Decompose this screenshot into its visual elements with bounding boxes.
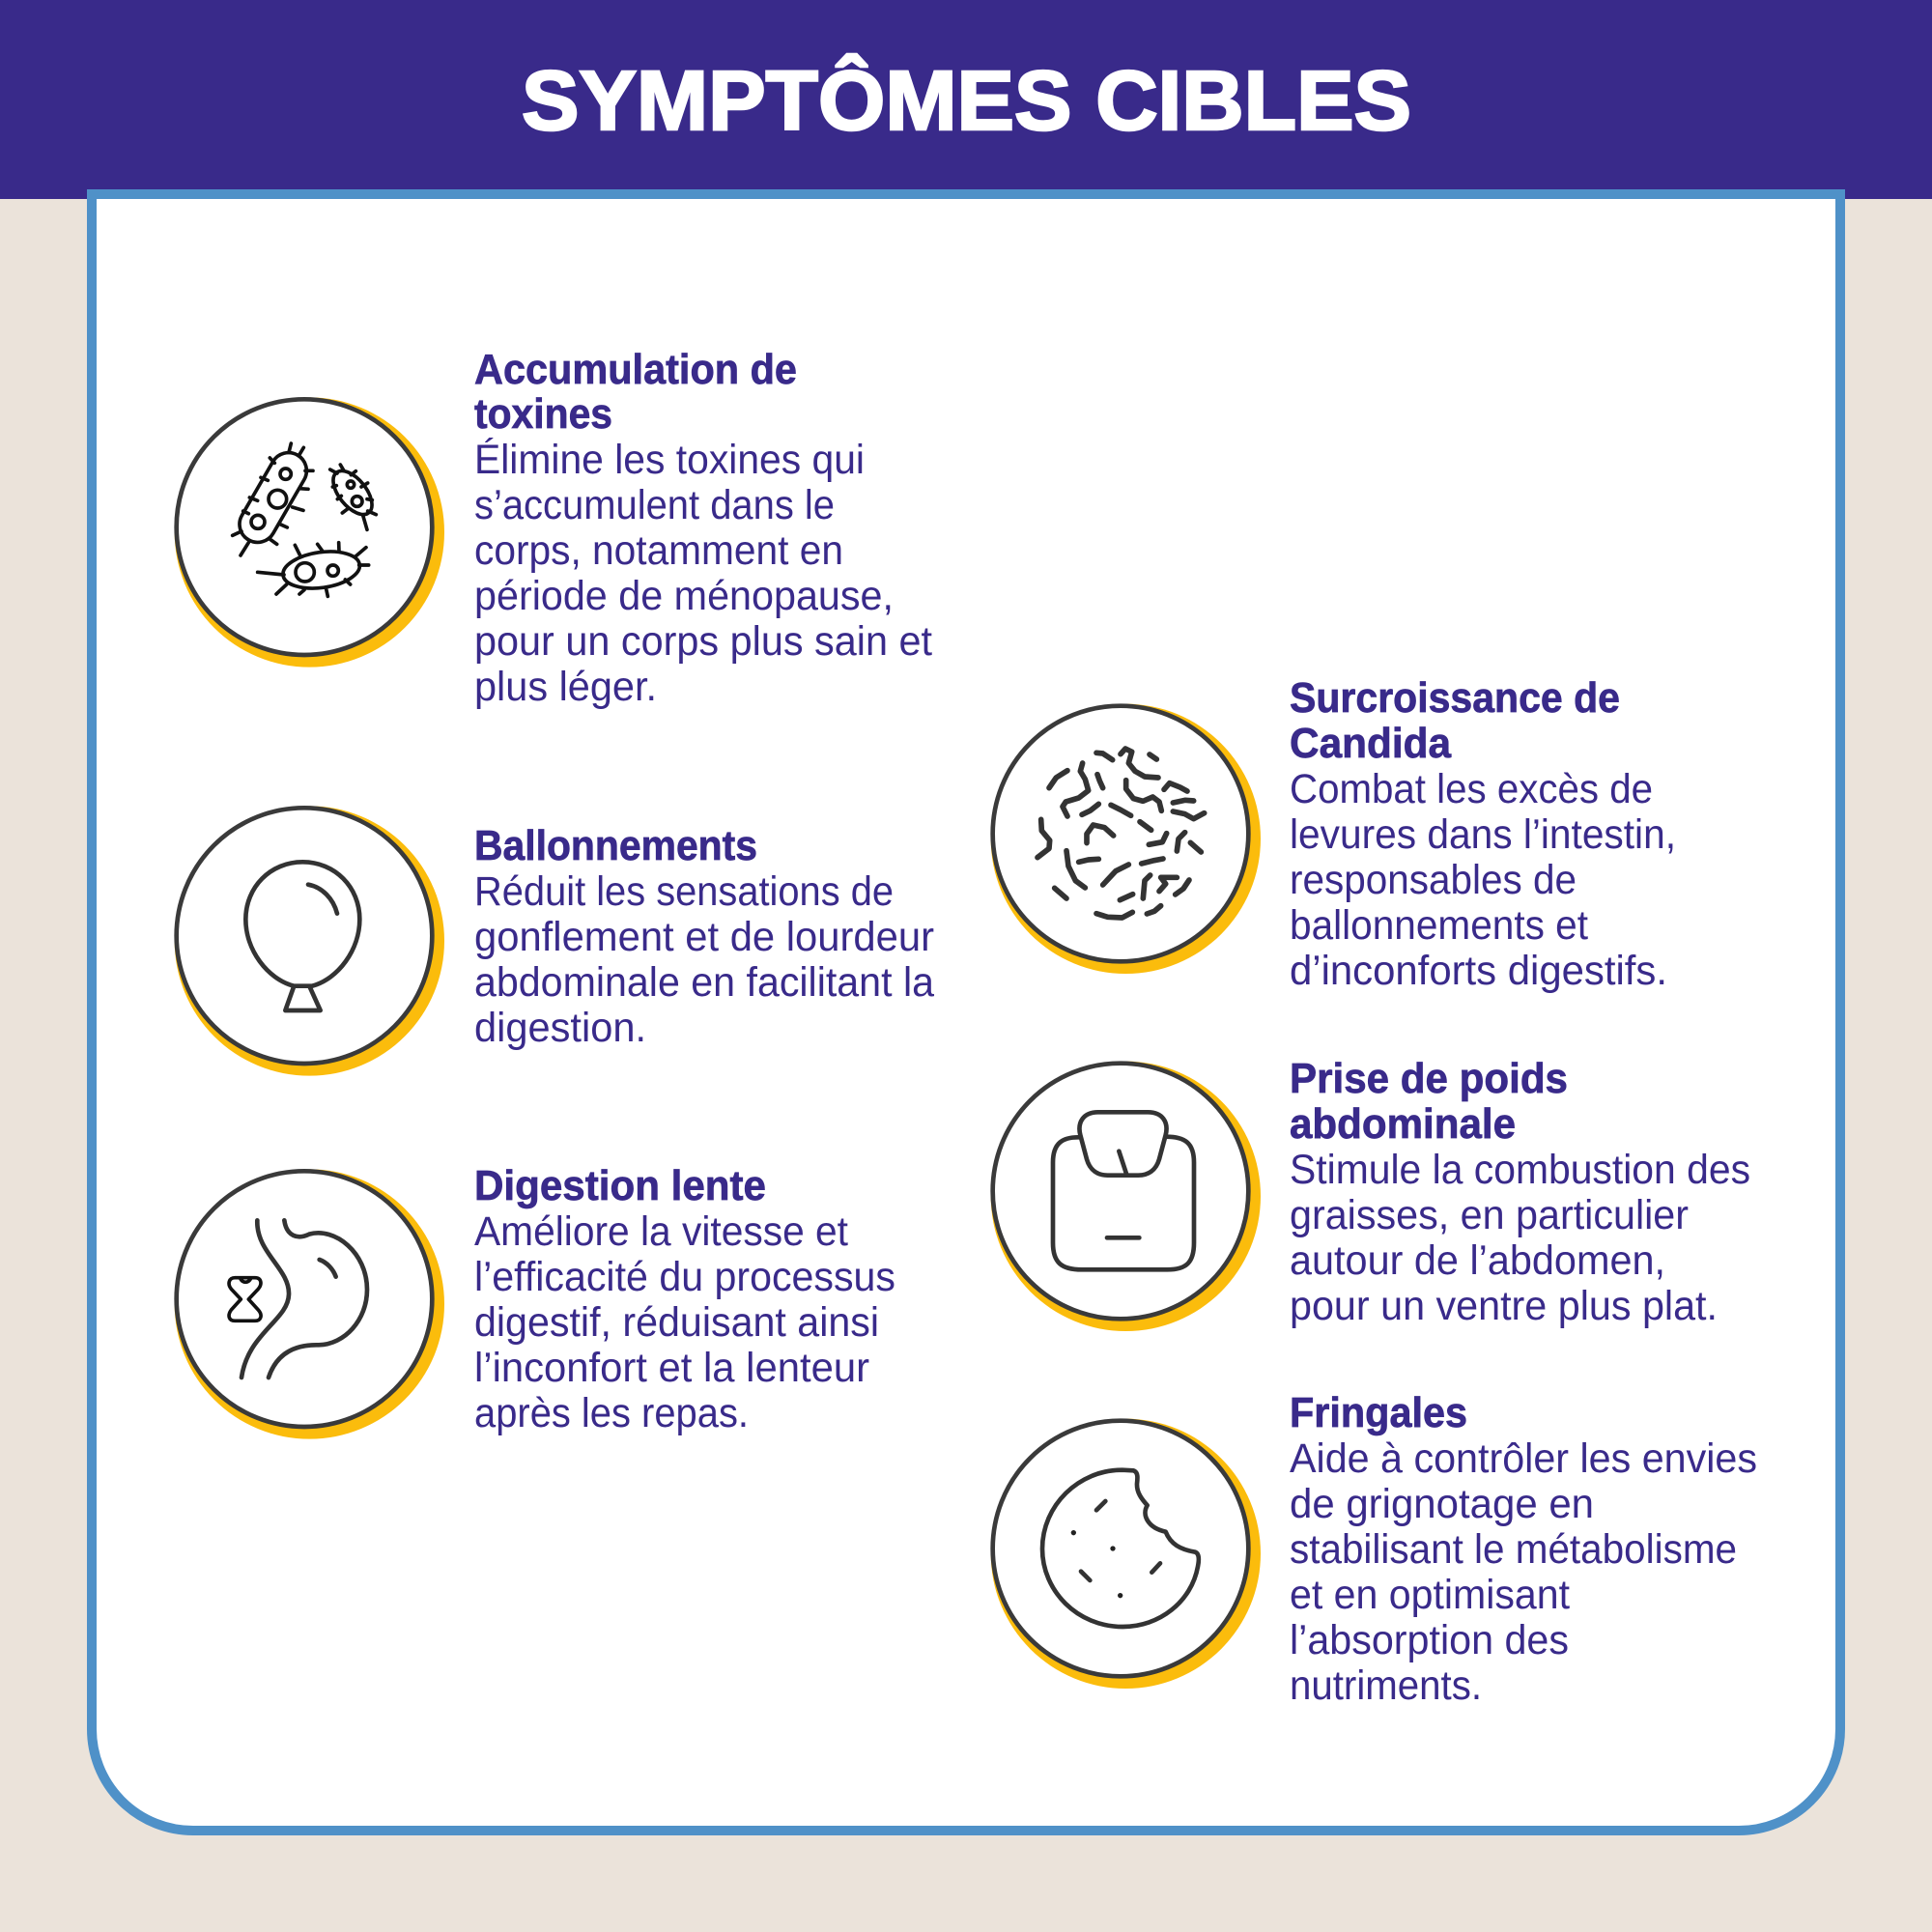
text block: période de ménopause, bbox=[474, 574, 894, 619]
panel: white card with blue border bbox=[92, 194, 1840, 1831]
text block: pour un ventre plus plat. bbox=[1290, 1284, 1718, 1329]
text block: nutriments. bbox=[1290, 1663, 1482, 1709]
text block bbox=[474, 1209, 895, 1436]
heading: Digestion lente bbox=[474, 1162, 766, 1209]
heading: Ballonnements bbox=[474, 822, 757, 869]
text block: plus léger. bbox=[474, 665, 657, 710]
heading: Prise de poids bbox=[1290, 1055, 1568, 1102]
text block: graisses, en particulier bbox=[1290, 1193, 1689, 1238]
text block: d’inconforts digestifs. bbox=[1290, 949, 1667, 994]
heading: Accumulation de bbox=[474, 346, 797, 393]
text block: l’inconfort et la lenteur bbox=[474, 1346, 869, 1391]
item: Digestion lente bbox=[175, 1162, 895, 1439]
icon: stomach and hourglass bbox=[175, 1169, 444, 1439]
icon: balloon bbox=[175, 806, 444, 1076]
heading bbox=[1290, 1055, 1568, 1148]
text block bbox=[474, 438, 932, 710]
text block bbox=[1290, 1436, 1757, 1709]
text block: digestif, réduisant ainsi bbox=[474, 1300, 879, 1346]
text block: pour un corps plus sain et bbox=[474, 619, 932, 665]
text block: Combat les excès de bbox=[1290, 767, 1653, 812]
item: Ballonnements bbox=[175, 806, 934, 1076]
text block: Aide à contrôler les envies bbox=[1290, 1436, 1757, 1482]
text block: levures dans l’intestin, bbox=[1290, 812, 1676, 858]
text block: ballonnements et bbox=[1290, 903, 1588, 949]
text block: digestion. bbox=[474, 1006, 646, 1051]
item: Prise de poids abdominale bbox=[991, 1055, 1750, 1331]
text block: corps, notamment en bbox=[474, 528, 843, 574]
text block: responsables de bbox=[1290, 858, 1577, 903]
heading bbox=[474, 346, 797, 438]
text block: gonflement et de lourdeur bbox=[474, 915, 934, 960]
text block: l’efficacité du processus bbox=[474, 1255, 895, 1300]
heading: toxines bbox=[474, 390, 612, 438]
text block: autour de l’abdomen, bbox=[1290, 1238, 1665, 1284]
heading: Surcroissance de bbox=[1290, 674, 1620, 722]
text block: Améliore la vitesse et bbox=[474, 1209, 848, 1255]
heading: abdominale bbox=[1290, 1100, 1516, 1148]
heading: Candida bbox=[1290, 720, 1452, 767]
text block: et en optimisant bbox=[1290, 1573, 1570, 1618]
icon: bitten cookie bbox=[991, 1419, 1261, 1689]
item: Surcroissance de Candida bbox=[991, 674, 1676, 994]
header band bbox=[0, 0, 1932, 199]
text block: de grignotage en bbox=[1290, 1482, 1594, 1527]
title: SYMPTÔMES CIBLES bbox=[522, 54, 1411, 148]
text block: stabilisant le métabolisme bbox=[1290, 1527, 1737, 1573]
text block bbox=[1290, 767, 1676, 994]
text block: après les repas. bbox=[474, 1391, 749, 1436]
item: Fringales bbox=[991, 1389, 1757, 1709]
icon: bacteria bbox=[175, 397, 444, 668]
text block: Stimule la combustion des bbox=[1290, 1148, 1750, 1193]
heading bbox=[1290, 674, 1620, 767]
text block: s’accumulent dans le bbox=[474, 483, 835, 528]
item: Accumulation de toxines bbox=[175, 346, 932, 710]
heading: Fringales bbox=[1290, 1389, 1467, 1436]
text block: Élimine les toxines qui bbox=[474, 438, 865, 483]
icon: candida filaments bbox=[991, 704, 1261, 974]
text block: abdominale en facilitant la bbox=[474, 960, 934, 1006]
text block: l’absorption des bbox=[1290, 1618, 1569, 1663]
text block: Réduit les sensations de bbox=[474, 869, 894, 915]
text block bbox=[1290, 1148, 1750, 1329]
icon: weighing scale bbox=[991, 1062, 1261, 1331]
text block bbox=[474, 869, 934, 1051]
